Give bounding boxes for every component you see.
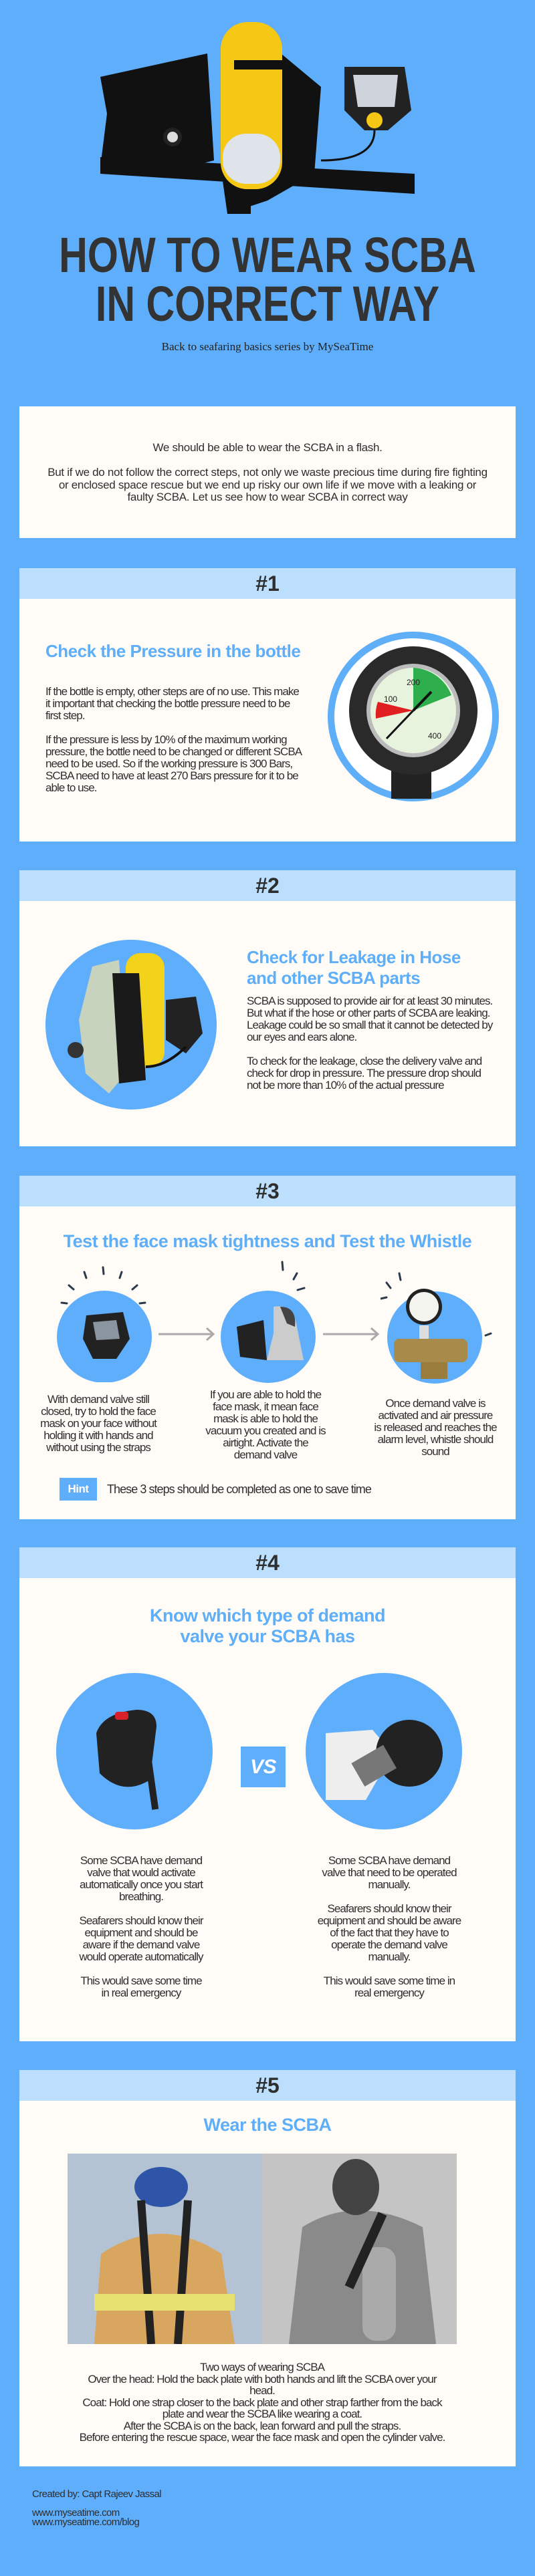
icon: manual demand valve — [306, 1673, 462, 1829]
icon: man holding mask — [221, 1261, 316, 1383]
text: two ways of wearing: Two ways of wearing SCBA — [200, 2361, 324, 2373]
icon: automatic demand valve — [56, 1673, 213, 1829]
photo: over the head method — [68, 2154, 262, 2344]
photo: coat method — [262, 2154, 457, 2344]
header: #2 — [19, 870, 516, 901]
panel: step 3 face mask and whistle — [19, 1206, 516, 1519]
hint box: Hint — [68, 1483, 89, 1495]
icon: SCBA harness in circle — [45, 940, 217, 1110]
header: #1: #1 — [255, 571, 280, 596]
text: automatic valve: Some SCBA have demand valve that would activate automatically once you start breathing. — [80, 1854, 203, 1903]
text: automatic valve: This would save some time in real emergency — [80, 1974, 202, 1999]
title — [59, 227, 476, 332]
header: #1 — [19, 568, 516, 599]
intro text box — [19, 406, 516, 538]
text: automatic valve: Seafarers should know their equipment and should be aware if the demand valve would operate automatically — [79, 1914, 203, 1963]
header: #2: #2 — [255, 874, 280, 898]
heading: check leakage: and other SCBA parts — [247, 968, 420, 988]
panel: step 2 leakage — [19, 901, 516, 1146]
heading: check pressure: Check the Pressure in the bottle — [45, 641, 300, 661]
text: leakage explanation — [247, 995, 494, 1091]
heading: demand valve type — [150, 1605, 385, 1646]
hero image: SCBA set — [100, 22, 415, 214]
text: two ways of wearing: Before entering the rescue space, wear the face mask and open the cylinder valve. — [80, 2431, 445, 2444]
text: two ways of wearing: Over the head: Hold the back plate with both hands and lift the SCBA over your head. — [88, 2373, 437, 2397]
heading: test face mask: Test the face mask tightness and Test the Whistle — [64, 1231, 471, 1251]
footer: credits: www.myseatime.com — [32, 2507, 120, 2519]
text: leakage explanation: To check for the leakage, close the delivery valve and check for drop in pressure. The pressure drop should not be more than 10% of the actual pressure — [247, 1055, 481, 1091]
text: two ways of wearing — [80, 2361, 445, 2444]
hint box: These 3 steps should be completed as one to save time — [107, 1483, 371, 1496]
heading: check leakage — [247, 947, 461, 988]
panel: step 5 wear the SCBA — [19, 2101, 516, 2466]
VS badge — [241, 1747, 286, 1787]
heading: wear the SCBA: Wear the SCBA — [203, 2115, 332, 2135]
hint box — [60, 1478, 372, 1501]
icon: pressure gauge — [328, 632, 499, 801]
text: pressure explanation: If the pressure is less by 10% of the maximum working pressure, the bottle need to be changed or different SCBA need to be used. So if the working pressure is 300 Bars, SCBA need to have at least 270 Bars pressure for it to be able to use. — [45, 733, 301, 794]
header: #4 — [19, 1547, 516, 1578]
text: manual valve: Seafarers should know their equipment and should be aware of the fact that they have to operate the demand valve manually. — [318, 1902, 461, 1963]
text: two ways of wearing: After the SCBA is on the back, lean forward and pull the straps. — [124, 2420, 401, 2432]
title: IN CORRECT WAY — [96, 276, 439, 332]
text: manual valve: This would save some time in real emergency — [324, 1974, 455, 1999]
VS badge: VS — [250, 1756, 276, 1778]
heading: demand valve type: Know which type of demand — [150, 1605, 385, 1626]
text: leakage explanation: SCBA is supposed to provide air for at least 30 minutes. But what if the hose or other parts of SCBA are leaking. Leakage could be so small that it cannot be detected by our eyes and ears alone. — [247, 995, 492, 1043]
arrow — [158, 1327, 215, 1341]
panel: step 1 pressure — [19, 599, 516, 842]
text: step 3 column 2: If you are able to hold the face mask, it mean face mask is able to hold the vacuum you created and is airtight. Activate the demand valve — [205, 1388, 326, 1461]
footer: credits: www.myseatime.com/blog — [32, 2517, 139, 2528]
subtitle: Back to seafaring basics series by MySeaTime — [162, 340, 373, 353]
icon: pressure gauge: 100 — [384, 694, 397, 704]
text: automatic valve — [79, 1854, 203, 1999]
text: manual valve: Some SCBA have demand valve that need to be operated manually. — [322, 1854, 457, 1891]
footer: credits: Created by: Capt Rajeev Jassal — [32, 2488, 161, 2500]
intro text box: But if we do not follow the correct steps, not only we waste precious time during fire fighting or enclosed space rescue but we end up risky our own life if we move with a leaking or faulty SCBA. Let us see how to wear SCBA in correct way — [47, 466, 488, 503]
icon: pressure gauge: 200 — [407, 678, 420, 687]
header: #3: #3 — [255, 1179, 280, 1203]
heading: demand valve type: valve your SCBA has — [180, 1626, 355, 1646]
intro text box: We should be able to wear the SCBA in a flash. — [152, 441, 383, 454]
panel: step 4 demand valve — [19, 1578, 516, 2041]
text: two ways of wearing: Coat: Hold one strap closer to the back plate and other strap farther from the back plate and wear the SCBA like wearing a coat. — [82, 2396, 442, 2420]
text: manual valve — [318, 1854, 461, 1999]
header: #4: #4 — [255, 1551, 280, 1575]
header: #5 — [19, 2070, 516, 2101]
text: pressure explanation — [45, 685, 302, 794]
arrow — [323, 1327, 379, 1341]
text: step 3 column 3: Once demand valve is activated and air pressure is released and reaches the alarm level, whistle should sound — [374, 1397, 497, 1458]
footer: credits — [32, 2488, 161, 2528]
heading: check leakage: Check for Leakage in Hose — [247, 947, 461, 967]
icon: face mask circle with rays — [57, 1266, 152, 1382]
header: #3 — [19, 1176, 516, 1206]
text: pressure explanation: If the bottle is empty, other steps are of no use. This make it important that checking the bottle pressure need to be first step. — [45, 685, 299, 722]
text: step 3 column 1: With demand valve still closed, try to hold the face mask on your face without holding it with hands and without using the straps — [40, 1393, 156, 1454]
title: HOW TO WEAR SCBA — [59, 227, 476, 283]
icon: pressure gauge: 400 — [428, 731, 441, 741]
header: #5: #5 — [255, 2073, 280, 2097]
icon: whistle gauge — [381, 1273, 492, 1384]
